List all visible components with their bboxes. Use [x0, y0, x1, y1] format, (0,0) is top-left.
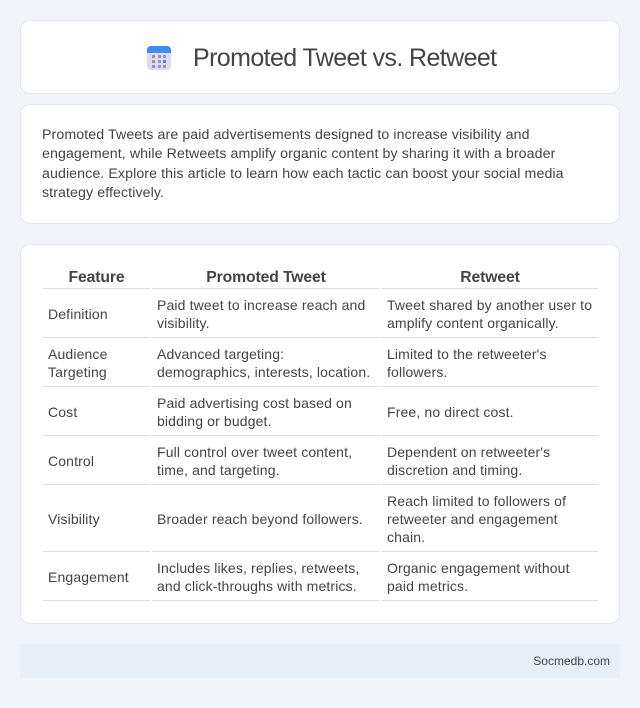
row: Audience Targeting: Limited to the retweeter's: [387, 346, 547, 362]
row: Definition: [43, 297, 598, 338]
row: Engagement: Includes likes, replies, retweets,: [157, 560, 359, 576]
intro card: [20, 104, 620, 224]
row: Control: discretion and timing.: [387, 462, 522, 478]
intro text: [42, 127, 564, 201]
table header: Retweet: [460, 269, 520, 286]
table header: [43, 269, 598, 289]
row: Visibility: Reach limited to followers of: [387, 493, 566, 509]
footer text: Socmedb.com: [533, 654, 610, 668]
row: Control: Control: [48, 453, 94, 469]
row: Control: time, and targeting.: [157, 462, 280, 478]
table header: Promoted Tweet: [206, 269, 326, 286]
intro text: engagement, while Retweets amplify organic content by sharing it with a broader: [42, 146, 555, 162]
row: Cost: Free, no direct cost.: [387, 404, 514, 420]
row: Engagement: and click-throughs with metrics.: [157, 578, 357, 594]
row: Engagement: [43, 560, 598, 601]
row: Audience Targeting: demographics, interests, location.: [157, 364, 370, 380]
row: Visibility: [43, 493, 598, 552]
table header: Feature: [69, 269, 124, 286]
intro text: strategy effectively.: [42, 185, 164, 201]
row: Visibility: Broader reach beyond followers.: [157, 511, 363, 527]
row: Engagement: Engagement: [48, 569, 129, 585]
row: Audience Targeting: Advanced targeting:: [157, 346, 284, 362]
comparison table: [43, 269, 598, 601]
row: Cost: Cost: [48, 404, 77, 420]
row: Engagement: Organic engagement without: [387, 560, 570, 576]
row: Cost: Paid advertising cost based on: [157, 395, 352, 411]
row: Definition: Paid tweet to increase reach and: [157, 297, 365, 313]
title card: [20, 20, 620, 94]
row: Definition: Definition: [48, 306, 108, 322]
row: Visibility: retweeter and engagement: [387, 511, 558, 527]
row: Control: Full control over tweet content,: [157, 444, 352, 460]
table card: [20, 244, 620, 624]
row: Control: Dependent on retweeter's: [387, 444, 550, 460]
row: Engagement: paid metrics.: [387, 578, 468, 594]
row: Cost: bidding or budget.: [157, 413, 272, 429]
row: Definition: Tweet shared by another user to: [387, 297, 592, 313]
intro text: Promoted Tweets are paid advertisements designed to increase visibility and: [42, 127, 530, 143]
row: Definition: visibility.: [157, 315, 210, 331]
row: Control: [43, 444, 598, 485]
icon: calendar: [147, 46, 171, 70]
intro text: audience. Explore this article to learn how each tactic can boost your social media: [42, 166, 564, 182]
row: Audience Targeting: Targeting: [48, 364, 107, 380]
row: Visibility: Visibility: [48, 511, 100, 527]
footer bar: [20, 644, 620, 678]
row: Audience Targeting: Audience: [48, 346, 108, 362]
row: Audience Targeting: [43, 346, 598, 387]
row: Visibility: chain.: [387, 529, 425, 545]
row: Audience Targeting: followers.: [387, 364, 448, 380]
title: Promoted Tweet vs. Retweet: [193, 44, 497, 72]
row: Definition: amplify content organically.: [387, 315, 559, 331]
row: Cost: [43, 395, 598, 436]
